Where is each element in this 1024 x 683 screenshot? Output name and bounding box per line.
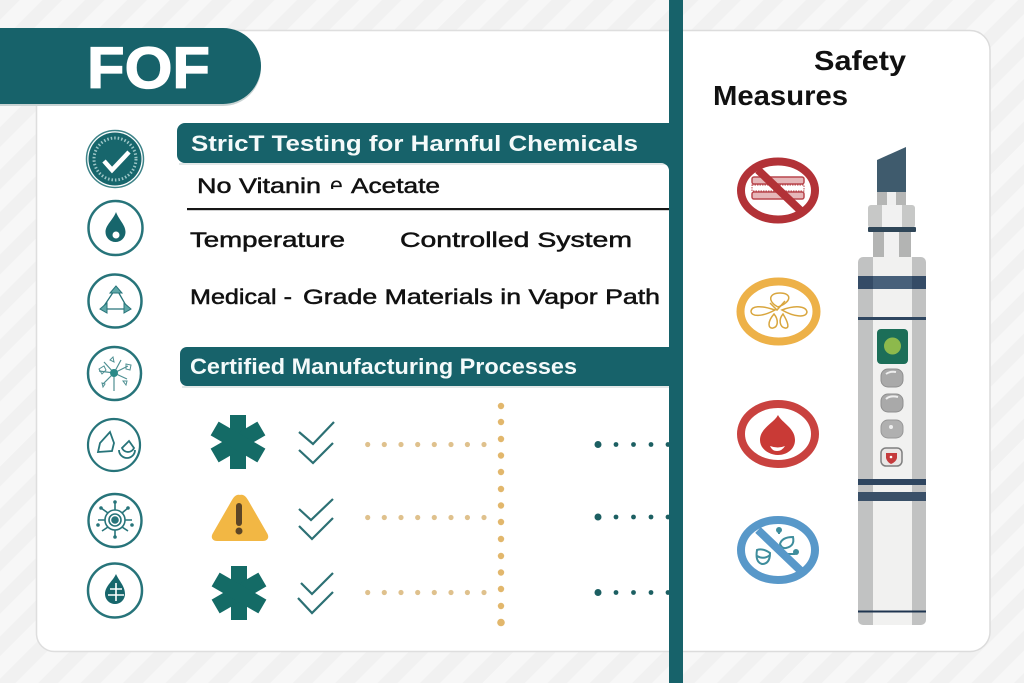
icon: molecule triangle [88,274,142,328]
heading: safety measures: Measures [713,80,848,111]
icon: certified check badge [86,130,144,188]
text: medical grade materials: Grade Materials in Vapor Path [303,286,660,309]
panel: strict testing heading [177,123,672,172]
text: medical grade materials: Medical - [190,286,292,309]
icon: double check row 1 [299,422,334,463]
text: no vitamin e acetate: Acetate [351,174,440,198]
text: temperature controlled system: Controlled System [400,229,632,252]
text: temperature controlled system: Temperature [190,229,345,252]
gold dotted connectors [365,403,505,626]
text: no vitamin e acetate: e [330,172,343,198]
icon: allergen shapes [88,419,140,471]
green indicator [877,329,908,364]
icon: red drop [741,404,815,464]
icon: orange flower [740,282,816,342]
panel: right card [680,30,990,652]
icon: no plants [741,520,815,580]
icon: drop [88,201,142,255]
text: medical grade materials [190,286,660,309]
teal dotted connectors [594,441,670,596]
icon: spreading particles [88,347,141,400]
icon: virus cell [88,494,142,547]
icon: double check row 3 [298,573,333,613]
icon: drop with cross [88,564,142,618]
heading: safety measures: Safety [814,45,906,76]
panel: left card [36,30,672,652]
panel: strict testing heading: StricT Testing for Harnful Chemicals [191,131,638,156]
icon: warning triangle [212,495,268,541]
vertical teal divider [669,0,683,683]
icon: medical star top [211,415,265,469]
panel: certified manufacturing heading [180,347,672,388]
control buttons [881,369,903,387]
title banner [0,28,261,106]
device: vape pen [858,147,926,625]
text: no vitamin e acetate: No Vitanin [197,174,321,198]
icon: medical star bottom [212,566,266,620]
text: temperature controlled system [190,229,632,252]
text: no vitamin e acetate [198,177,440,194]
pen tip [877,147,906,192]
icon: no cartridge [741,162,815,220]
panel: certified manufacturing heading: Certified Manufacturing Processes [190,354,577,379]
heading: safety measures [713,45,906,111]
icon: double check row 2 [299,499,333,539]
title banner: FOF [87,36,210,101]
